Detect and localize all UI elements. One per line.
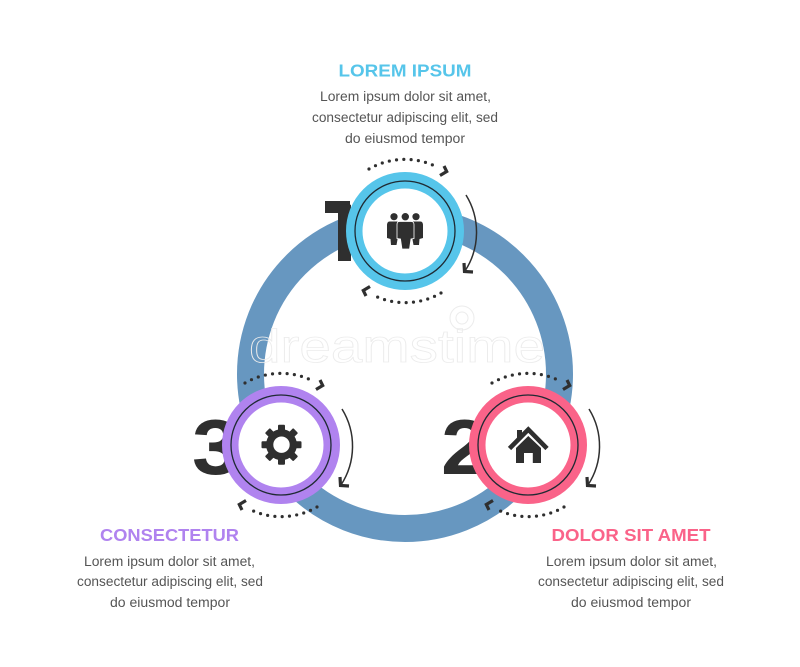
dotted arc top — [492, 373, 560, 383]
body text: do eiusmod tempor — [571, 595, 692, 610]
circle: blue ring — [354, 180, 456, 282]
arrow head — [464, 263, 473, 272]
body text: consectetur adipiscing elit, sed — [538, 574, 724, 589]
step 2 node — [477, 373, 600, 517]
dotted arc bottom — [496, 507, 564, 517]
step 3 node — [230, 373, 353, 517]
number 1 — [325, 201, 351, 261]
arrow head — [587, 477, 596, 486]
body text: Lorem ipsum dolor sit amet, — [546, 554, 717, 569]
chevron top — [440, 166, 447, 176]
solid arrow arc — [465, 195, 477, 271]
dotted arc bottom — [373, 293, 441, 303]
text block: dolor sit amet — [538, 525, 724, 610]
number 3: 3 — [192, 405, 240, 491]
circle: inner line — [355, 181, 455, 281]
body text — [312, 89, 498, 146]
circle: inner line — [478, 395, 578, 495]
chevron bottom — [239, 500, 246, 510]
chevron bottom — [363, 286, 370, 296]
body text: do eiusmod tempor — [110, 595, 231, 610]
dotted arc bottom — [249, 507, 317, 517]
heading: lorem ipsum: LOREM IPSUM — [338, 60, 472, 80]
text block: lorem ipsum — [312, 60, 498, 146]
dotted arc top — [245, 373, 313, 383]
icon: house — [510, 430, 547, 463]
watermark — [249, 306, 545, 372]
solid arrow arc — [341, 409, 353, 485]
circle: pink ring — [477, 394, 579, 496]
step 1 node — [354, 159, 477, 303]
body text: Lorem ipsum dolor sit amet, — [84, 554, 255, 569]
body text — [538, 554, 724, 610]
chevron bottom — [486, 500, 493, 510]
heading: dolor sit amet: DOLOR SIT AMET — [552, 525, 711, 545]
icon: gear — [262, 425, 302, 465]
dotted arc top — [369, 159, 437, 169]
icon: people — [387, 213, 423, 249]
body text: consectetur adipiscing elit, sed — [77, 574, 263, 589]
circle: inner line — [231, 395, 331, 495]
heading: consectetur: CONSECTETUR — [100, 525, 239, 545]
body text: consectetur adipiscing elit, sed — [312, 110, 498, 125]
body text: do eiusmod tempor — [345, 131, 466, 146]
chevron top — [563, 380, 570, 390]
number 1: 1 — [321, 188, 367, 279]
text block: consectetur — [77, 525, 263, 610]
number 2: 2 — [441, 405, 489, 491]
chevron top — [316, 380, 323, 390]
arrow head — [340, 477, 349, 486]
circle: purple ring — [230, 394, 332, 496]
solid arrow arc — [588, 409, 600, 485]
body text — [77, 554, 263, 610]
watermark: dreamstime — [249, 320, 545, 372]
large blue ring — [250, 220, 560, 528]
body text: Lorem ipsum dolor sit amet, — [320, 89, 491, 104]
